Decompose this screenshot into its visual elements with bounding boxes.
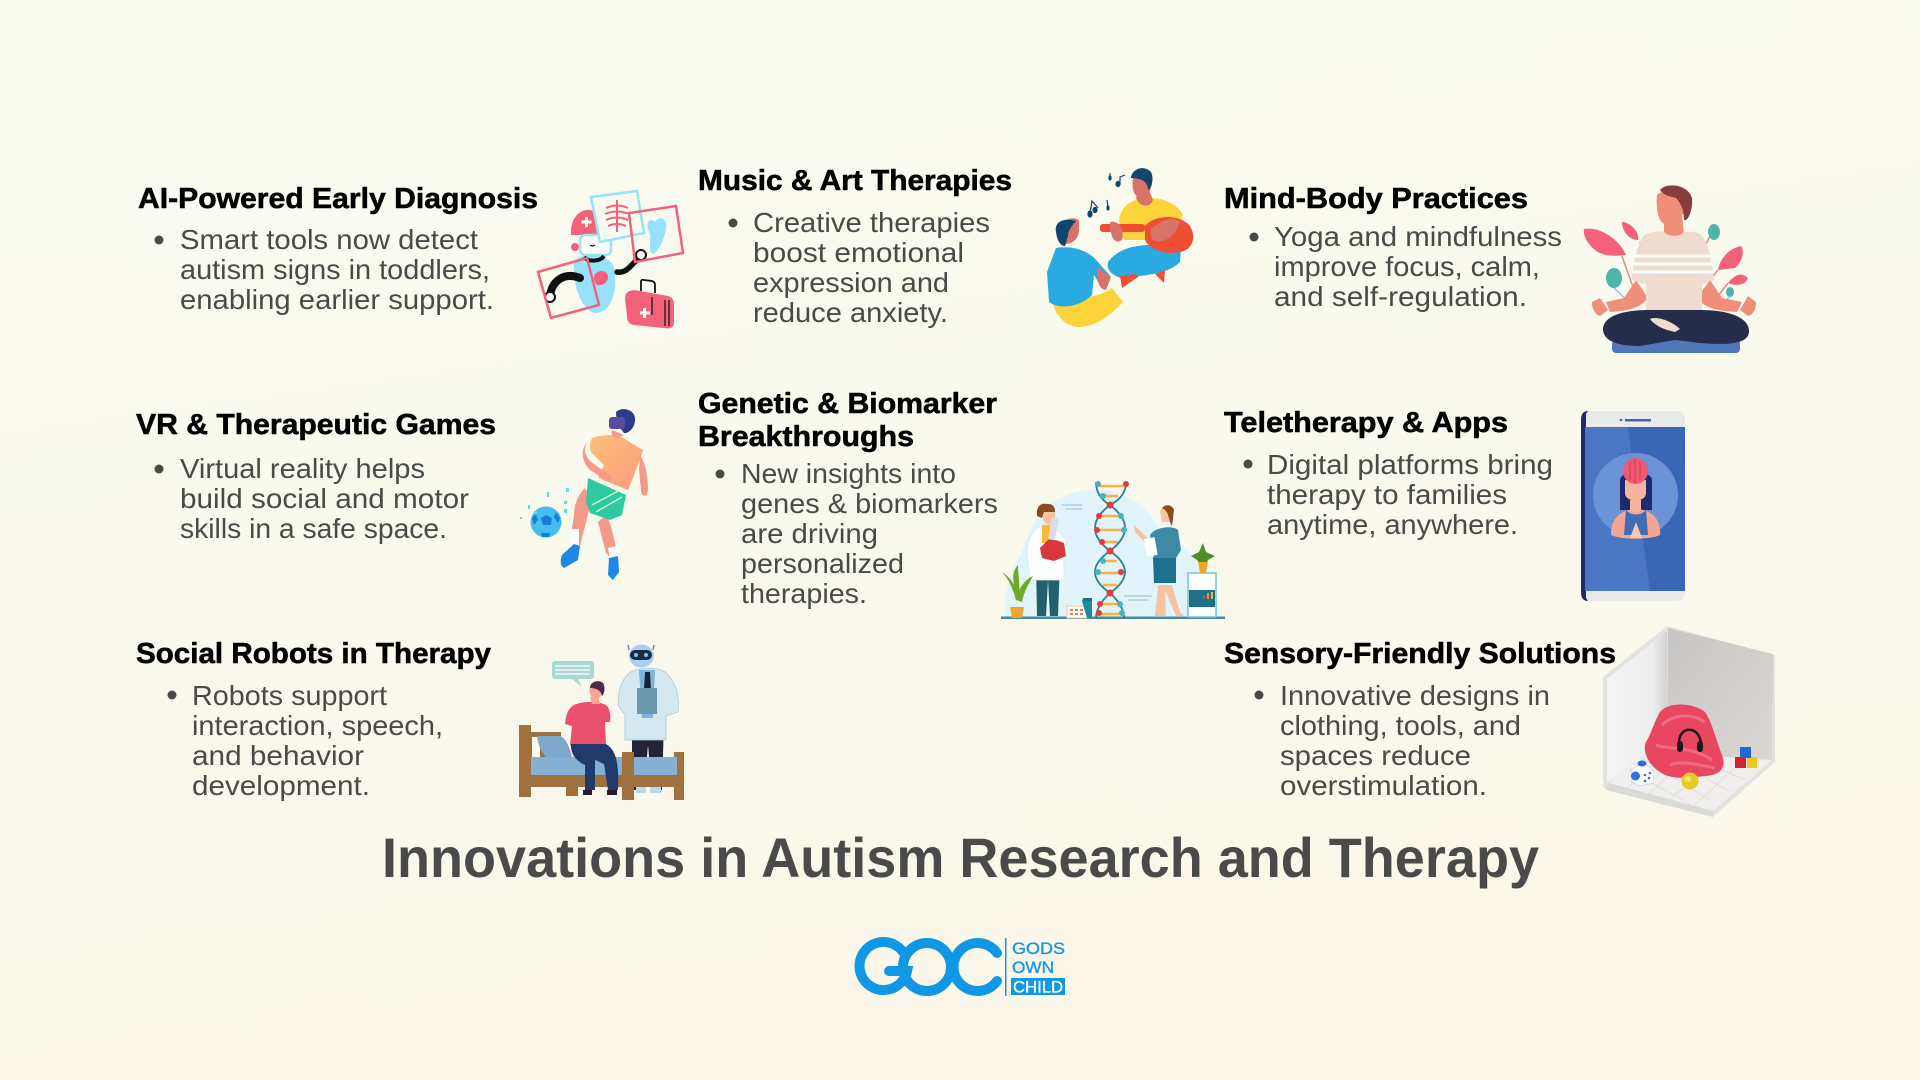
- panel: VR & Therapeutic Games: [136, 409, 648, 580]
- text block: music and art: boost emotional: [753, 237, 964, 268]
- icon: robot doctor and patient on bed: [519, 644, 684, 800]
- text block: AI diagnosis: Smart tools now detect: [180, 224, 478, 255]
- text block: social robots: development.: [192, 770, 370, 801]
- icon: scientists and DNA helix: [1001, 481, 1225, 619]
- icon: musicians with guitar: [1047, 168, 1193, 327]
- heading: Teletherapy & Apps: Teletherapy & Apps: [1224, 407, 1508, 439]
- text block: VR: skills in a safe space.: [180, 513, 447, 544]
- icon: boy kicking ball in VR headset: [520, 409, 648, 580]
- text block: music and art: expression and: [753, 267, 949, 298]
- icon: GOC letters: [860, 942, 997, 991]
- text block: genetics: personalized: [741, 548, 904, 579]
- panel: Sensory-Friendly Solutions: [1224, 626, 1775, 817]
- heading: VR & Therapeutic Games: VR & Therapeutic Games: [136, 409, 496, 441]
- title: Innovations in Autism Research and Therapy: [382, 826, 1539, 889]
- text block: sensory: overstimulation.: [1280, 770, 1487, 801]
- text block: sensory: [1254, 680, 1550, 801]
- text block: teletherapy: [1244, 449, 1553, 540]
- text block: music and art: reduce anxiety.: [753, 297, 948, 328]
- text block: social robots: [168, 680, 443, 801]
- text block: social robots: and behavior: [192, 740, 364, 771]
- text block: genetics: are driving: [741, 518, 878, 549]
- logo: Gods Own Child: CHILD: [1013, 978, 1063, 996]
- text block: AI diagnosis: autism signs in toddlers,: [180, 254, 490, 285]
- text block: mind-body: Yoga and mindfulness: [1274, 221, 1562, 252]
- text block: VR: build social and motor: [180, 483, 469, 514]
- text block: sensory: Innovative designs in: [1280, 680, 1550, 711]
- panel: Social Robots in Therapy: [136, 638, 684, 801]
- text block: VR: [154, 453, 469, 544]
- text block: teletherapy: anytime, anywhere.: [1267, 509, 1518, 540]
- panel: AI-Powered Early Diagnosis: [138, 183, 683, 328]
- text block: genetics: [716, 458, 998, 609]
- icon: medical robot with scans: [538, 191, 683, 328]
- panel: Teletherapy & Apps: [1224, 407, 1685, 601]
- icon: sensory room corner: [1603, 626, 1775, 817]
- text block: genetics: therapies.: [741, 578, 867, 609]
- text block: genetics: genes & biomarkers: [741, 488, 998, 519]
- panel: Mind-Body Practices: [1224, 183, 1756, 353]
- logo: Gods Own Child: [860, 938, 1065, 996]
- text block: VR: Virtual reality helps: [180, 453, 425, 484]
- heading: Genetic & Biomarker Breakthroughs: Breakthroughs: [698, 421, 914, 453]
- panel: Genetic & Biomarker Breakthroughs: [698, 388, 1225, 619]
- text block: social robots: interaction, speech,: [192, 710, 443, 741]
- text block: teletherapy: Digital platforms bring: [1267, 449, 1553, 480]
- icon: phone with calm person: [1581, 411, 1685, 601]
- heading: Mind-Body Practices: Mind-Body Practices: [1224, 183, 1528, 215]
- text block: music and art: [728, 207, 990, 328]
- panel: Music & Art Therapies: [698, 165, 1193, 328]
- text block: music and art: Creative therapies: [753, 207, 990, 238]
- heading: Genetic & Biomarker Breakthroughs: [698, 388, 997, 453]
- text block: mind-body: improve focus, calm,: [1274, 251, 1540, 282]
- text block: AI diagnosis: [154, 224, 494, 315]
- text block: mind-body: and self-regulation.: [1274, 281, 1527, 312]
- heading: Genetic & Biomarker Breakthroughs: Genetic & Biomarker: [698, 388, 997, 420]
- text block: sensory: spaces reduce: [1280, 740, 1471, 771]
- text block: sensory: clothing, tools, and: [1280, 710, 1521, 741]
- text block: AI diagnosis: enabling earlier support.: [180, 284, 494, 315]
- heading: Music & Art Therapies: Music & Art Therapies: [698, 165, 1012, 197]
- logo: Gods Own Child: OWN: [1012, 958, 1054, 977]
- heading: AI-Powered Early Diagnosis: AI-Powered Early Diagnosis: [138, 183, 538, 215]
- heading: Social Robots in Therapy: Social Robots in Therapy: [136, 638, 491, 670]
- heading: Sensory-Friendly Solutions: Sensory-Friendly Solutions: [1224, 638, 1616, 670]
- text block: social robots: Robots support: [192, 680, 387, 711]
- icon: man meditating with leaves: [1584, 185, 1756, 353]
- text block: genetics: New insights into: [741, 458, 956, 489]
- logo: Gods Own Child: GODS: [1012, 939, 1065, 958]
- text block: mind-body: [1250, 221, 1562, 312]
- text block: teletherapy: therapy to families: [1267, 479, 1507, 510]
